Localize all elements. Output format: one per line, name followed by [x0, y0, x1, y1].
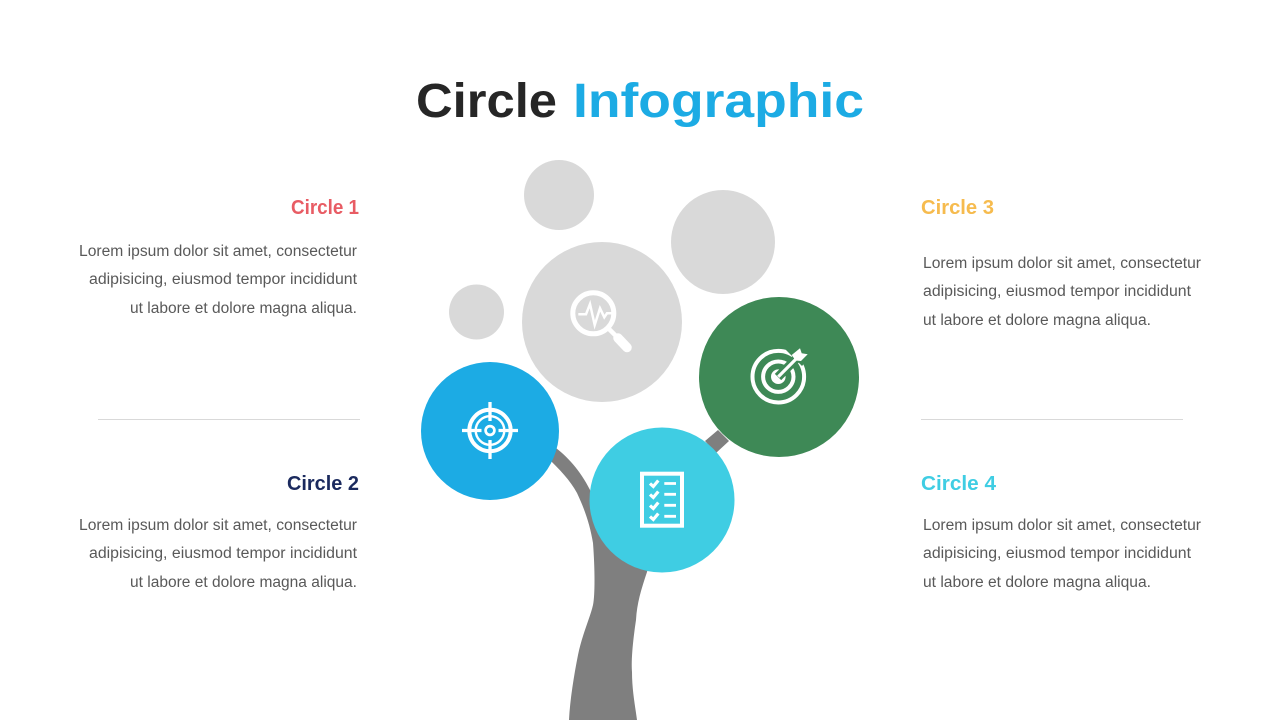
grey circle large — [522, 242, 682, 402]
panel: circle 1 text — [79, 197, 359, 317]
icon: crosshair target — [462, 402, 518, 459]
heading: circle 2: Circle 2 — [287, 473, 359, 495]
text block: circle 4: adipisicing, eiusmod tempor incididunt — [923, 545, 1192, 562]
circle 2 blue — [421, 362, 559, 500]
text block: circle 3: adipisicing, eiusmod tempor incididunt — [923, 283, 1192, 300]
icon: magnifier with pulse — [573, 293, 627, 348]
grey circle small left — [449, 284, 504, 340]
text block: circle 1: ut labore et dolore magna aliqua. — [130, 300, 357, 317]
panel: circle 3 text — [921, 197, 1201, 329]
text block: circle 4: ut labore et dolore magna aliqua. — [923, 574, 1151, 591]
circle 3 green — [699, 297, 859, 457]
text block: circle 2: adipisicing, eiusmod tempor incididunt — [89, 545, 358, 562]
text block: circle 1 — [79, 243, 358, 317]
text block: circle 4 — [923, 517, 1201, 591]
icon: bullseye with arrow — [752, 340, 812, 403]
text block: circle 3: Lorem ipsum dolor sit amet, consectetur — [923, 255, 1201, 272]
text block: circle 2: ut labore et dolore magna aliqua. — [130, 574, 357, 591]
text block: circle 3: ut labore et dolore magna aliqua. — [923, 312, 1151, 329]
title: Circle — [416, 75, 557, 128]
text block: circle 3 — [923, 255, 1201, 329]
text block: circle 2 — [79, 517, 358, 591]
text block: circle 2: Lorem ipsum dolor sit amet, consectetur — [79, 517, 357, 534]
icon: checklist — [642, 474, 682, 526]
grey circle small top — [524, 160, 594, 230]
panel: circle 2 text — [79, 473, 359, 591]
tree trunk and branches — [546, 430, 729, 720]
text block: circle 4: Lorem ipsum dolor sit amet, consectetur — [923, 517, 1201, 534]
panel: circle 4 text — [921, 473, 1201, 591]
text block: circle 1: adipisicing, eiusmod tempor incididunt — [89, 271, 358, 288]
heading: circle 4: Circle 4 — [921, 473, 997, 495]
title: Infographic — [573, 75, 864, 128]
text block: circle 1: Lorem ipsum dolor sit amet, consectetur — [79, 243, 357, 260]
heading: circle 1: Circle 1 — [291, 197, 359, 219]
grey circle medium top right — [671, 190, 775, 294]
title — [416, 75, 864, 128]
circle 4 cyan — [590, 428, 734, 572]
heading: circle 3: Circle 3 — [921, 197, 994, 219]
